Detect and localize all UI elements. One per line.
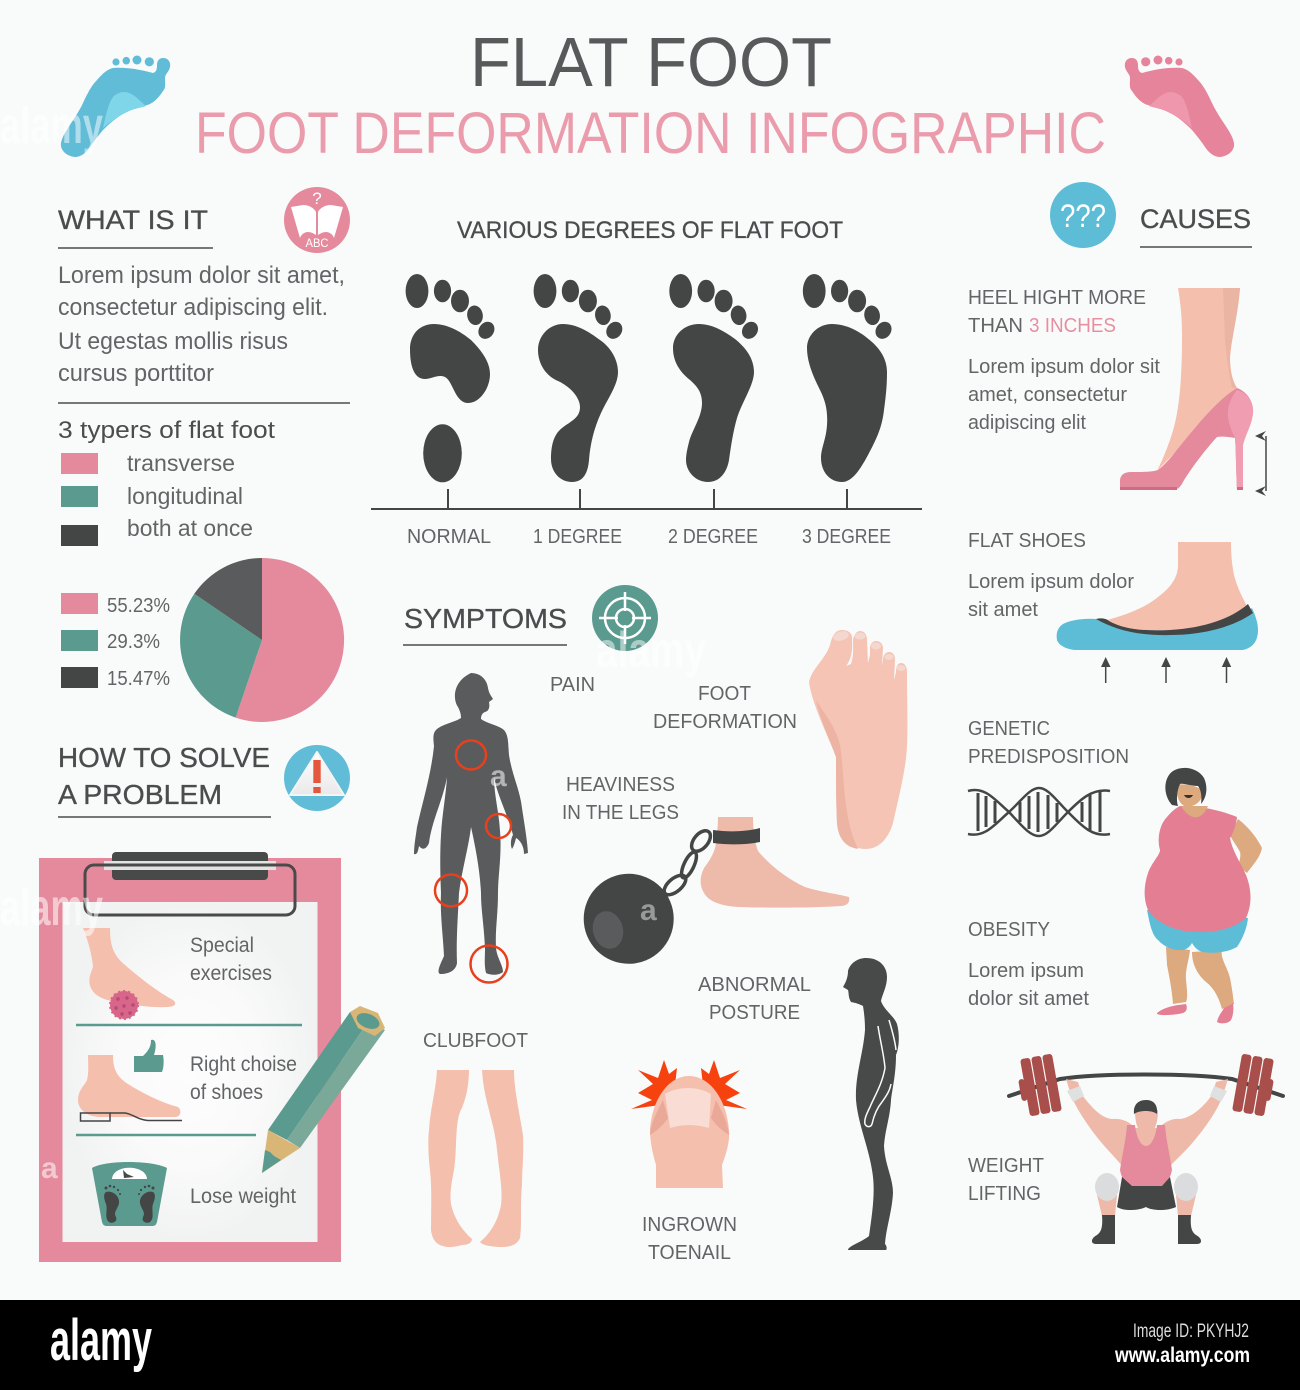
illustration: ingrown toenail: [631, 1060, 747, 1188]
icon: book: ?: [312, 189, 322, 208]
text block: description: consectetur adipiscing elit.: [58, 294, 328, 321]
text: alamy: [0, 97, 103, 155]
icon: pink footprint: [1125, 56, 1234, 157]
footer bar: alamy: [50, 1308, 152, 1373]
panel: types legend: transverse: [127, 450, 235, 476]
label: heaviness in the legs: HEAVINESS: [566, 774, 675, 796]
heading: what is it: WHAT IS IT: [58, 205, 208, 235]
illustration: ball and chain on foot: a: [640, 894, 657, 927]
axis labels: NORMAL: [407, 526, 491, 548]
chart legend: percentages: 15.47%: [107, 668, 170, 690]
text: special exercises: exercises: [190, 962, 272, 985]
cause: flat shoes text: [968, 529, 1134, 621]
label: abnormal posture: [698, 974, 811, 1024]
text block: description: cursus porttitor: [58, 360, 214, 387]
footprint: normal: [406, 274, 498, 482]
heading: causes: CAUSES: [1140, 204, 1251, 234]
label: ingrown toenail: TOENAIL: [648, 1242, 731, 1264]
illustration: high heel: [1120, 288, 1253, 490]
footprint: 1 degree: [534, 274, 626, 482]
axis with ticks: [371, 489, 922, 509]
heading: degrees: VARIOUS DEGREES OF FLAT FOOT: [457, 217, 843, 244]
panel: symptoms: alamy: [596, 622, 706, 678]
illustration: flat shoe: [1057, 542, 1258, 650]
panel: types legend: [58, 417, 275, 546]
panel: degrees of flat foot: [371, 217, 922, 548]
chart legend: percentages: 55.23%: [107, 595, 170, 617]
footer bar: Image ID: PKYHJ2: [1133, 1321, 1249, 1342]
axis labels: 3 DEGREE: [802, 526, 891, 548]
panel: causes: [968, 182, 1283, 1244]
cause: obesity text: dolor sit amet: [968, 987, 1089, 1010]
cause: flat shoes text: sit amet: [968, 598, 1038, 621]
human figure with pain points: [414, 673, 528, 982]
subtitle: FOOT DEFORMATION INFOGRAPHIC: [195, 101, 1106, 166]
text: right choise of shoes: Right choise: [190, 1053, 297, 1076]
cause: weight lifting text: [968, 1154, 1044, 1205]
icon: foot on insole: [78, 1055, 182, 1121]
icon: question marks: ???: [1060, 198, 1106, 234]
label: ingrown toenail: INGROWN: [642, 1214, 737, 1236]
cause: obesity text: Lorem ipsum: [968, 959, 1084, 982]
illustration: weight lifter: [1009, 1054, 1283, 1244]
panel: types legend: both at once: [127, 515, 253, 541]
cause: heel height text: [968, 286, 1160, 434]
label: foot deformation: [653, 683, 797, 733]
cause: obesity text: OBESITY: [968, 918, 1050, 941]
heading: how to solve: [58, 742, 271, 817]
cause: flat shoes text: Lorem ipsum dolor: [968, 570, 1134, 593]
cause: heel height text: THAN: [968, 314, 1023, 337]
icon: foot on massage ball: [83, 928, 175, 1019]
footer bar: [0, 1300, 1300, 1390]
heading: symptoms: SYMPTOMS: [404, 603, 567, 634]
footprint: 2 degree: [669, 274, 761, 482]
icon: thumbs up: [134, 1040, 164, 1072]
label: pain: PAIN: [550, 674, 595, 696]
title: FLAT FOOT: [470, 23, 832, 101]
illustration: obese woman: [1145, 768, 1262, 1023]
axis labels: [407, 526, 891, 548]
text: a: [41, 1152, 58, 1185]
illustration: clubfoot legs: [428, 1070, 523, 1247]
icon: dna helix: [968, 788, 1110, 836]
label: ingrown toenail: [642, 1214, 737, 1264]
axis labels: 1 DEGREE: [533, 526, 622, 548]
icon: blue footprint: [61, 56, 170, 157]
axis labels: 2 DEGREE: [668, 526, 758, 548]
icon: book: ABC: [306, 236, 329, 250]
text: right choise of shoes: [190, 1053, 297, 1104]
icon: bathroom scale: [92, 1162, 167, 1226]
panel: types legend: longitudinal: [127, 483, 243, 509]
cause: flat shoes text: FLAT SHOES: [968, 529, 1086, 552]
text: alamy: [0, 879, 103, 937]
text block: description: Ut egestas mollis risus: [58, 328, 288, 355]
heading: types: 3 typers of flat foot: [58, 417, 275, 444]
label: clubfoot: CLUBFOOT: [423, 1030, 528, 1052]
label: abnormal posture: POSTURE: [709, 1002, 800, 1024]
arrow: heel height: [1255, 431, 1266, 496]
chart legend: percentages: 29.3%: [107, 631, 160, 653]
heading: how to solve: HOW TO SOLVE: [58, 742, 270, 773]
label: heaviness in the legs: [562, 774, 679, 824]
chart legend: percentages: [61, 593, 170, 690]
label: abnormal posture: ABNORMAL: [698, 974, 811, 996]
icon: target: [592, 585, 658, 651]
cause: heel height text: Lorem ipsum dolor sit: [968, 355, 1160, 378]
pie chart: [180, 558, 344, 722]
icon: pencil: [262, 1006, 385, 1173]
cause: heel height text: 3 INCHES: [1029, 314, 1116, 337]
cause: obesity text: [968, 918, 1089, 1010]
panel: what is it: [58, 187, 350, 387]
text block: description: [58, 262, 345, 387]
text: special exercises: [190, 934, 272, 985]
cause: heel height text: amet, consectetur: [968, 383, 1127, 406]
icon: question marks: [1050, 182, 1116, 248]
illustration: side posture figure: [843, 958, 899, 1250]
cause: genetic predisposition text: [968, 717, 1129, 768]
footprint: 3 degree: [803, 274, 895, 482]
footer bar: www.alamy.com: [1114, 1344, 1250, 1367]
panel: clipboard: [39, 852, 341, 1262]
text block: description: Lorem ipsum dolor sit amet,: [58, 262, 345, 289]
human figure with pain points: a: [490, 760, 507, 793]
illustration: deformed foot sole: [809, 630, 907, 849]
panel: symptoms: [403, 585, 907, 1264]
cause: weight lifting text: WEIGHT: [968, 1154, 1044, 1177]
cause: weight lifting text: LIFTING: [968, 1182, 1041, 1205]
icon: book: [284, 187, 350, 253]
text: right choise of shoes: of shoes: [190, 1081, 263, 1104]
heading: how to solve: A PROBLEM: [58, 779, 222, 810]
cause: genetic predisposition text: GENETIC: [968, 717, 1050, 740]
text: special exercises: Special: [190, 934, 254, 957]
icon: warning: [284, 745, 350, 811]
text: lose weight: Lose weight: [190, 1185, 296, 1208]
label: foot deformation: DEFORMATION: [653, 711, 797, 733]
cause: genetic predisposition text: PREDISPOSITION: [968, 745, 1129, 768]
label: foot deformation: FOOT: [698, 683, 751, 705]
cause: heel height text: adipiscing elit: [968, 411, 1086, 434]
label: heaviness in the legs: IN THE LEGS: [562, 802, 679, 824]
arrows: upward pressure: [1101, 657, 1231, 683]
illustration: ball and chain on foot: [584, 817, 849, 964]
cause: heel height text: HEEL HIGHT MORE: [968, 286, 1146, 309]
